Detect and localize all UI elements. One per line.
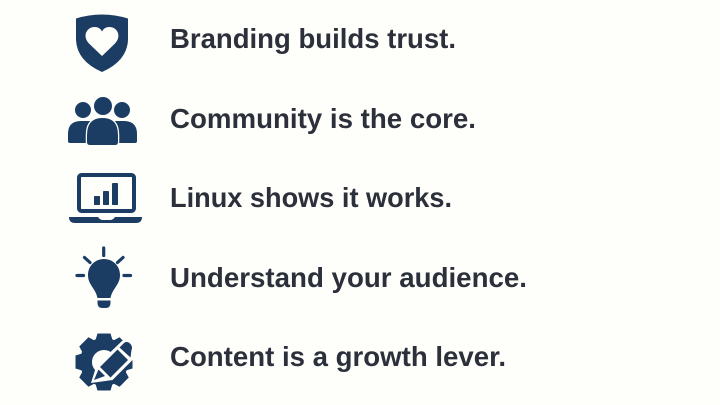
icon: light bulb <box>77 248 130 308</box>
icon: laptop with bar chart <box>69 175 142 223</box>
row 5: content <box>76 334 506 390</box>
text: understand your audience: Understand your audience. <box>170 262 527 293</box>
icon: group of people <box>68 97 137 145</box>
row 2: community <box>68 97 476 145</box>
text: branding builds trust: Branding builds trust. <box>170 23 456 54</box>
row 1: branding <box>76 14 456 72</box>
icon: shield with heart <box>76 14 128 72</box>
text: content is a growth lever: Content is a growth lever. <box>170 341 506 372</box>
row 3: linux <box>69 175 452 223</box>
text: linux shows it works: Linux shows it works. <box>170 182 452 213</box>
icon: gear with pencil <box>76 334 134 390</box>
text: community is the core: Community is the core. <box>170 103 476 134</box>
row 4: audience <box>77 248 527 308</box>
